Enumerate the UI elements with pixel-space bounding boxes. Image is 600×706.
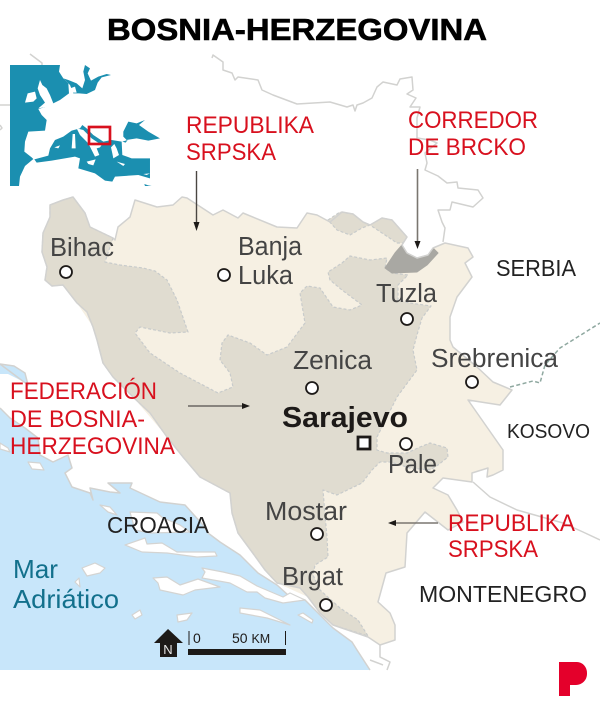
arrow: Corredor de Brcko [414, 169, 420, 249]
city: Srebrenica: Srebrenica [431, 345, 559, 373]
city: Banja Luka: Banja [238, 233, 303, 261]
inset locator map of Europe [10, 65, 160, 186]
city: Zenica: Zenica [293, 347, 373, 375]
country label: Montenegro: MONTENEGRO [419, 581, 587, 607]
label: Republika Srpska north: REPUBLIKA [186, 112, 314, 139]
scale bar: 50 KM [232, 630, 270, 646]
arrow: Republika Srpska south [388, 520, 438, 526]
map: Corredor de Brcko territory [385, 245, 438, 273]
label: Republika Srpska south: REPUBLIKA [448, 510, 575, 537]
arrow: Republika Srpska north [194, 171, 200, 231]
title: BOSNIA-HERZEGOVINA [107, 12, 487, 47]
label: Federación de Bosnia-Herzegovina: DE BOSNIA- [10, 406, 145, 433]
country label: Kosovo: KOSOVO [507, 421, 590, 443]
city: Mostar: Mostar [265, 498, 348, 526]
label: Republika Srpska north: SRPSKA [186, 139, 276, 166]
city: Tuzla: Tuzla [376, 280, 438, 308]
capital: Sarajevo [282, 402, 408, 449]
icon: north arrow: N [163, 642, 173, 657]
label: Federación de Bosnia-Herzegovina [10, 378, 175, 460]
label: Republika Srpska north [186, 112, 314, 166]
city: Banja Luka [218, 233, 303, 290]
city: Banja Luka: Luka [238, 262, 294, 290]
label: Federación de Bosnia-Herzegovina: FEDERACIÓN [10, 378, 157, 405]
city: Tuzla [376, 280, 438, 325]
label: Republika Srpska south: SRPSKA [448, 536, 538, 563]
label: Republika Srpska south [448, 510, 575, 563]
arrow: Federación [188, 403, 250, 409]
country label: Croacia: CROACIA [107, 512, 209, 538]
sea label: Mar Adriático: Mar [13, 554, 58, 584]
city: Srebrenica [431, 345, 559, 388]
scale bar [188, 630, 286, 655]
scale bar: 0 [193, 630, 201, 646]
city: Bihac: Bihac [50, 234, 114, 262]
city: Brgat: Brgat [282, 563, 343, 591]
city: Bihac [50, 234, 114, 278]
sea label: Mar Adriático: Adriático [13, 584, 119, 614]
city: Pale [388, 438, 437, 479]
inset highlight square [89, 127, 110, 144]
map: Bosnia outer border [42, 197, 512, 645]
logo: Público P [559, 662, 587, 696]
city: Zenica [293, 347, 373, 394]
sea label: Mar Adriático [13, 554, 119, 614]
city: Brgat [282, 563, 343, 611]
country label: Serbia: SERBIA [496, 255, 576, 281]
label: Corredor de Brcko: DE BRCKO [408, 134, 526, 161]
label: Federación de Bosnia-Herzegovina: HERZEGOVINA [10, 433, 175, 460]
map: Federación territory [42, 197, 448, 636]
label: Corredor de Brcko [408, 107, 538, 161]
label: Corredor de Brcko: CORREDOR [408, 107, 538, 134]
capital: Sarajevo: Sarajevo [282, 402, 408, 434]
sea: Mar Adriático [0, 364, 370, 670]
city: Mostar [265, 498, 348, 540]
map: Republika Srpska territory [42, 197, 512, 645]
islands of Croatia [0, 443, 313, 625]
icon: north arrow [154, 629, 183, 657]
city: Pale: Pale [388, 451, 437, 479]
